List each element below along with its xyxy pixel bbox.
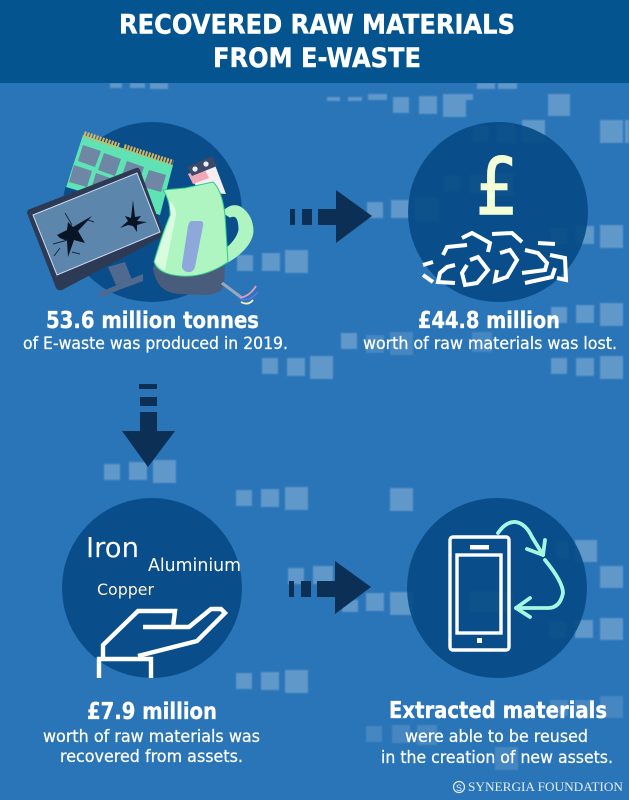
- arrow: down: [122, 384, 175, 467]
- heading: lost value: £44.8 million: [418, 306, 560, 334]
- icon: kettle: [153, 182, 252, 295]
- icon: open hand: [99, 609, 225, 678]
- text: reuse: [381, 727, 613, 767]
- panel: recovered materials: [43, 498, 260, 766]
- icon: memory module: [66, 134, 173, 215]
- label: aluminium: Aluminium: [148, 555, 241, 576]
- heading: tonnes: 53.6 million tonnes: [46, 306, 259, 334]
- text: reuse: in the creation of new assets.: [381, 748, 613, 767]
- icon: battery plug: [187, 156, 226, 194]
- title: RECOVERED RAW MATERIALS: [119, 10, 515, 40]
- circle: recovered backdrop: [62, 498, 242, 678]
- icon: smartphone: [450, 537, 509, 650]
- text: recovered: worth of raw materials was: [43, 727, 260, 746]
- panel: e-waste produced: [23, 122, 288, 353]
- text: recovered: [43, 727, 260, 766]
- header band: [0, 0, 629, 83]
- title: [119, 10, 515, 74]
- circle: lost backdrop: [408, 122, 588, 302]
- logo: Synergia Foundation: S: [456, 783, 462, 793]
- label: copper: Copper: [97, 580, 154, 599]
- title: FROM E-WASTE: [213, 43, 421, 74]
- icon: screen cracks: [53, 200, 147, 257]
- text: reuse: were able to be reused: [405, 727, 588, 746]
- label: iron: Iron: [86, 531, 139, 564]
- panel: materials lost: [363, 122, 617, 353]
- logo: Synergia Foundation: SYNERGIA FOUNDATION: [468, 779, 624, 794]
- arrow: right top: [290, 190, 372, 243]
- icon: frayed cable: [222, 283, 258, 304]
- arrow: right bottom: [289, 561, 371, 614]
- panel: reuse: [381, 498, 613, 767]
- text: lost: worth of raw materials was lost.: [363, 334, 617, 353]
- circle: reuse backdrop: [407, 498, 587, 678]
- text: produced: of E-waste was produced in 2019.: [23, 334, 288, 353]
- icon: broken monitor: [27, 168, 163, 297]
- heading: recovered value: £7.9 million: [87, 697, 217, 725]
- icon: rubble pile: [423, 233, 566, 285]
- icon: pound sign: £: [476, 143, 518, 233]
- icon: recycle arrows: [498, 522, 563, 617]
- text: recovered: recovered from assets.: [60, 747, 243, 766]
- circle: e-waste backdrop: [62, 122, 242, 302]
